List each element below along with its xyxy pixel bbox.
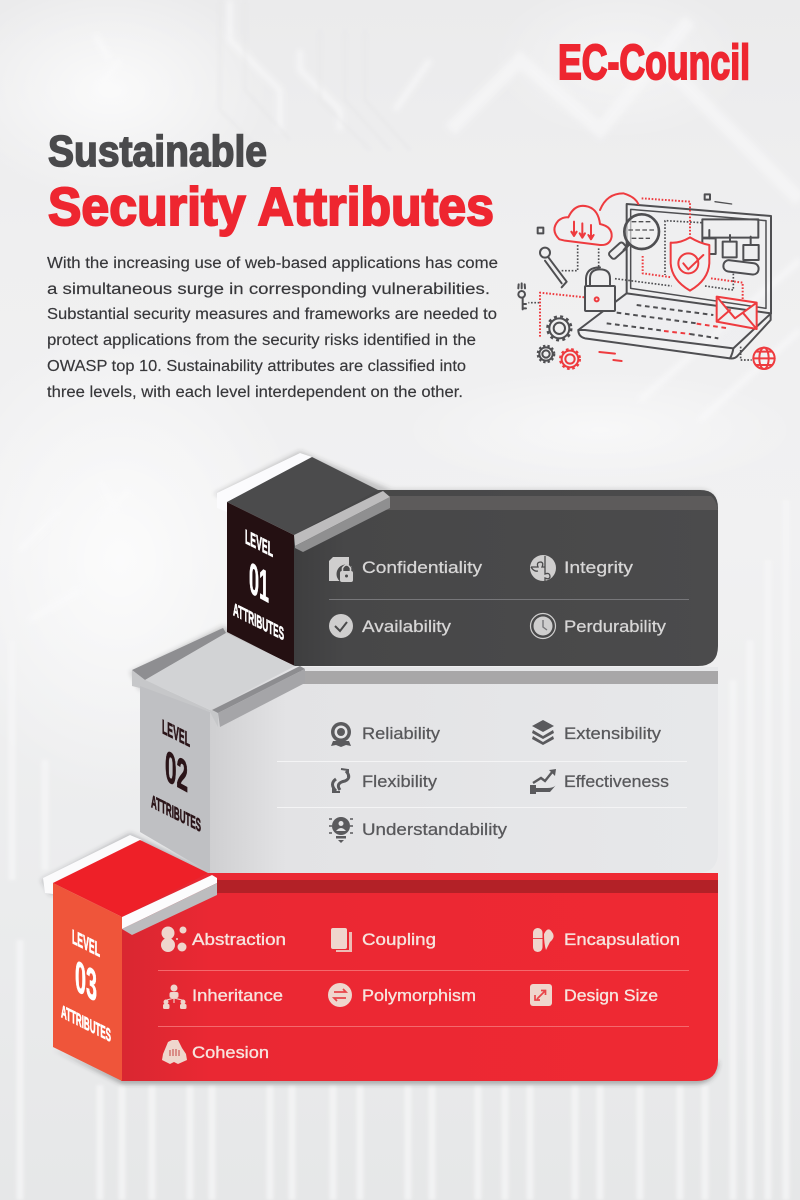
block: level 01 cube bbox=[217, 453, 390, 666]
labels level 03: Coupling bbox=[362, 930, 436, 949]
panel 01 top band bbox=[380, 496, 718, 510]
face text level 02 bbox=[151, 716, 201, 837]
intro text block bbox=[47, 255, 498, 401]
labels level 03: Inheritance bbox=[192, 986, 283, 1005]
intro text block: OWASP top 10. Sustainability attributes are classified into bbox=[47, 358, 466, 375]
face text level 01 bbox=[233, 526, 284, 645]
labels level 02: Flexibility bbox=[362, 772, 438, 791]
labels level 01 bbox=[362, 558, 667, 636]
labels level 03: Encapsulation bbox=[564, 930, 680, 949]
face text level 01: 01 bbox=[249, 553, 269, 613]
labels level 01: Perdurability bbox=[564, 617, 667, 636]
block: level 03 cube: ATTRIBUTES bbox=[61, 1002, 111, 1047]
intro text block: Substantial security measures and frameworks are needed to bbox=[47, 306, 497, 323]
panel: level 03 bbox=[121, 873, 718, 1081]
title bbox=[48, 127, 494, 237]
labels level 01: Integrity bbox=[564, 558, 634, 577]
labels level 02: Understandability bbox=[362, 820, 508, 839]
shadows behind stacked blocks bbox=[41, 451, 719, 1084]
block: level 01 cube: ATTRIBUTES bbox=[233, 600, 284, 645]
labels level 03 bbox=[192, 930, 680, 1062]
panel 02 top band bbox=[300, 671, 718, 684]
labels level 02: Effectiveness bbox=[564, 772, 669, 791]
panel 03 top band bbox=[200, 880, 718, 893]
labels level 03: Abstraction bbox=[192, 930, 286, 949]
title line: Sustainable: Sustainable bbox=[48, 127, 267, 176]
block: level 03 cube bbox=[43, 835, 217, 1081]
title line: Security Attributes: Security Attributes bbox=[48, 177, 494, 237]
labels level 03: Design Size bbox=[564, 986, 658, 1005]
panel: level 02 bbox=[210, 667, 718, 873]
face text level 03: LEVEL bbox=[72, 926, 100, 962]
block: level 02 cube: ATTRIBUTES bbox=[151, 792, 201, 837]
face text level 02: LEVEL bbox=[162, 716, 190, 752]
labels level 02 bbox=[362, 724, 669, 839]
labels level 02: Reliability bbox=[362, 724, 441, 743]
intro text block: three levels, with each level interdependent on the other. bbox=[47, 384, 463, 401]
labels level 02: Extensibility bbox=[564, 724, 662, 743]
face text level 03: 03 bbox=[75, 951, 97, 1012]
labels level 03: Cohesion bbox=[192, 1043, 269, 1062]
icons level 02 bbox=[329, 720, 556, 843]
labels level 01: Confidentiality bbox=[362, 558, 483, 577]
intro text block: protect applications from the security risks identified in the bbox=[47, 332, 476, 349]
labels level 03: Polymorphism bbox=[362, 986, 476, 1005]
face text level 01: LEVEL bbox=[245, 526, 273, 562]
intro text block: With the increasing use of web-based applications has come bbox=[47, 255, 498, 272]
face text level 02: 02 bbox=[165, 741, 188, 803]
icons level 03 bbox=[161, 926, 554, 1064]
block: level 02 cube bbox=[132, 628, 305, 873]
icons level 01 bbox=[329, 555, 556, 638]
labels level 01: Availability bbox=[362, 617, 452, 636]
intro text block: a simultaneous surge in corresponding vulnerabilities. bbox=[47, 281, 490, 298]
face text level 03 bbox=[61, 926, 111, 1047]
illustration: laptop with security icons bbox=[518, 193, 775, 369]
panel: level 01 bbox=[294, 490, 718, 666]
